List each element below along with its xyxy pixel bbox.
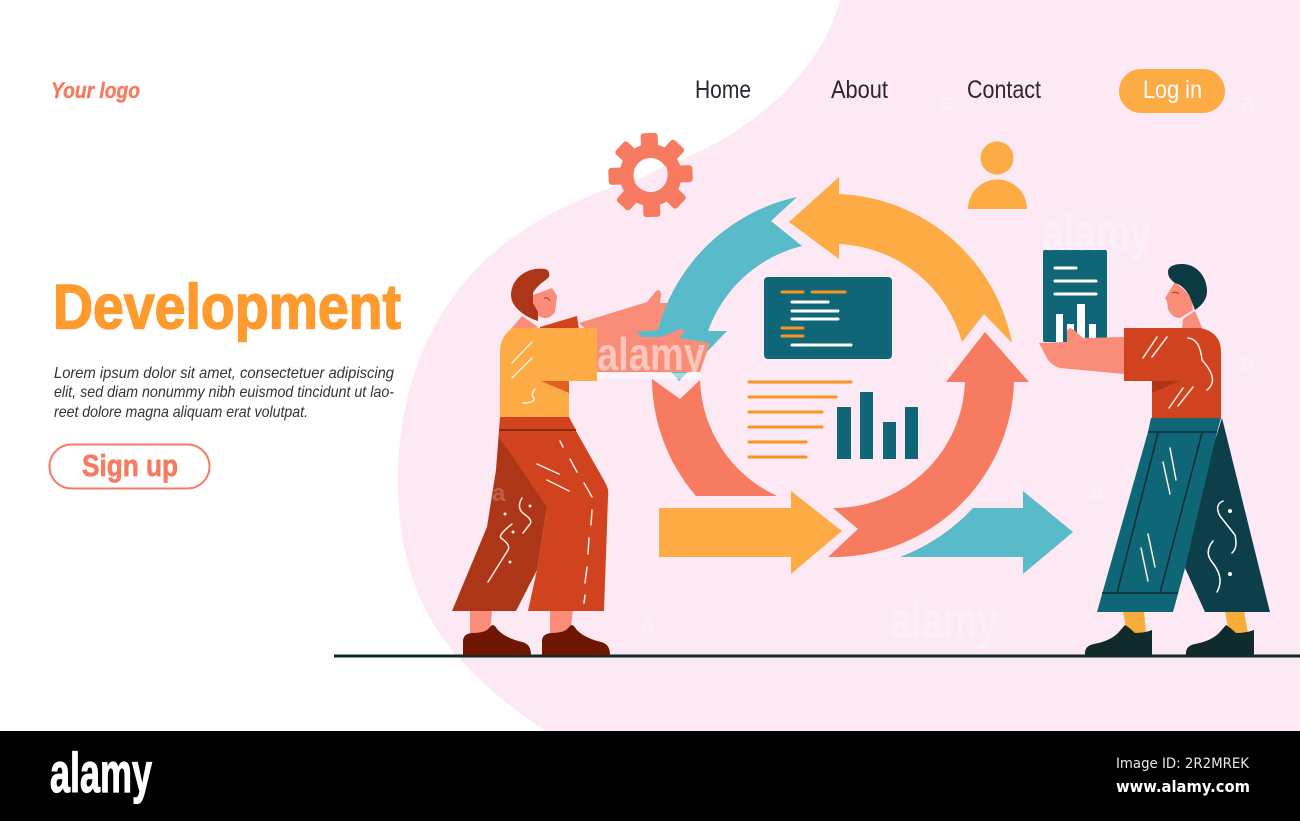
sleeve shadow [541,381,569,393]
arm [1039,328,1124,374]
watermark: a [940,89,954,116]
cycle arrow: coral left [652,379,777,496]
sleeve shadow [1152,381,1180,393]
code screen [764,277,892,359]
collar [540,316,579,330]
watermark: alamy [1043,204,1151,262]
footer bar [0,731,1300,821]
footer logo: alamy [50,741,152,804]
watermark: a [940,349,954,376]
text lines [749,382,851,457]
navigation: About [831,76,888,104]
watermark: a [641,610,655,637]
shirt [1124,328,1221,418]
navigation: Home [695,76,751,104]
image id: Image ID: 2R2MREK [1116,756,1249,772]
trousers teal [1097,432,1217,612]
watermark: a [1241,349,1255,376]
heading: Development [53,272,401,342]
website: www.alamy.com [1116,777,1250,796]
body text: reet dolore magna aliquam erat volutpat. [54,404,308,421]
person left [452,269,710,655]
trousers dark [1185,418,1270,612]
watermark [492,89,1255,650]
person right [1039,250,1270,655]
navigation [695,76,1041,104]
document [1043,250,1107,342]
clothing marks [1141,337,1236,592]
sign up button: Sign up [82,448,178,483]
icon: user [968,142,1027,209]
belt [1148,418,1221,432]
socks [1123,611,1248,634]
body text [54,365,394,421]
sign up button [50,444,210,488]
face [533,288,557,318]
clothing marks [488,342,592,603]
hair [1168,264,1207,310]
neck [1182,311,1203,330]
background pink blob [398,0,1300,731]
shoes [463,625,610,655]
watermark: a [1090,479,1104,506]
log in button: Log in [1143,76,1202,104]
ground line [334,654,1300,658]
cycle arrow: orange [789,177,1012,343]
straight arrow: orange [659,491,842,574]
trousers dark [452,430,547,611]
belt [499,417,576,430]
watermark: alamy [597,328,705,380]
logo: Your logo [51,78,140,103]
cycle arrow: teal [637,197,802,381]
neck [505,316,538,340]
front arm [590,329,710,372]
hair [511,269,549,321]
straight arrow: teal [900,491,1073,574]
shoes [1085,625,1254,655]
shirt [500,328,597,417]
trouser seams [1102,432,1217,593]
eye [544,298,550,301]
face [1165,282,1193,318]
man one back arm [579,290,690,340]
legs [470,610,573,634]
eye [1172,292,1179,294]
watermark: alamy [890,592,998,650]
navigation: Contact [967,76,1041,104]
body text: elit, sed diam nonummy nibh euismod tincidunt ut lao- [54,384,394,401]
watermark: a [1241,89,1255,116]
log in button [1119,69,1225,113]
waist line [499,429,576,431]
body text: Lorem ipsum dolor sit amet, consectetuer adipiscing [54,365,394,382]
trousers light [499,431,608,611]
cycle arrow: coral right [828,332,1029,557]
icon: gear [607,132,694,218]
watermark: a [492,480,506,507]
bar chart [837,392,918,459]
